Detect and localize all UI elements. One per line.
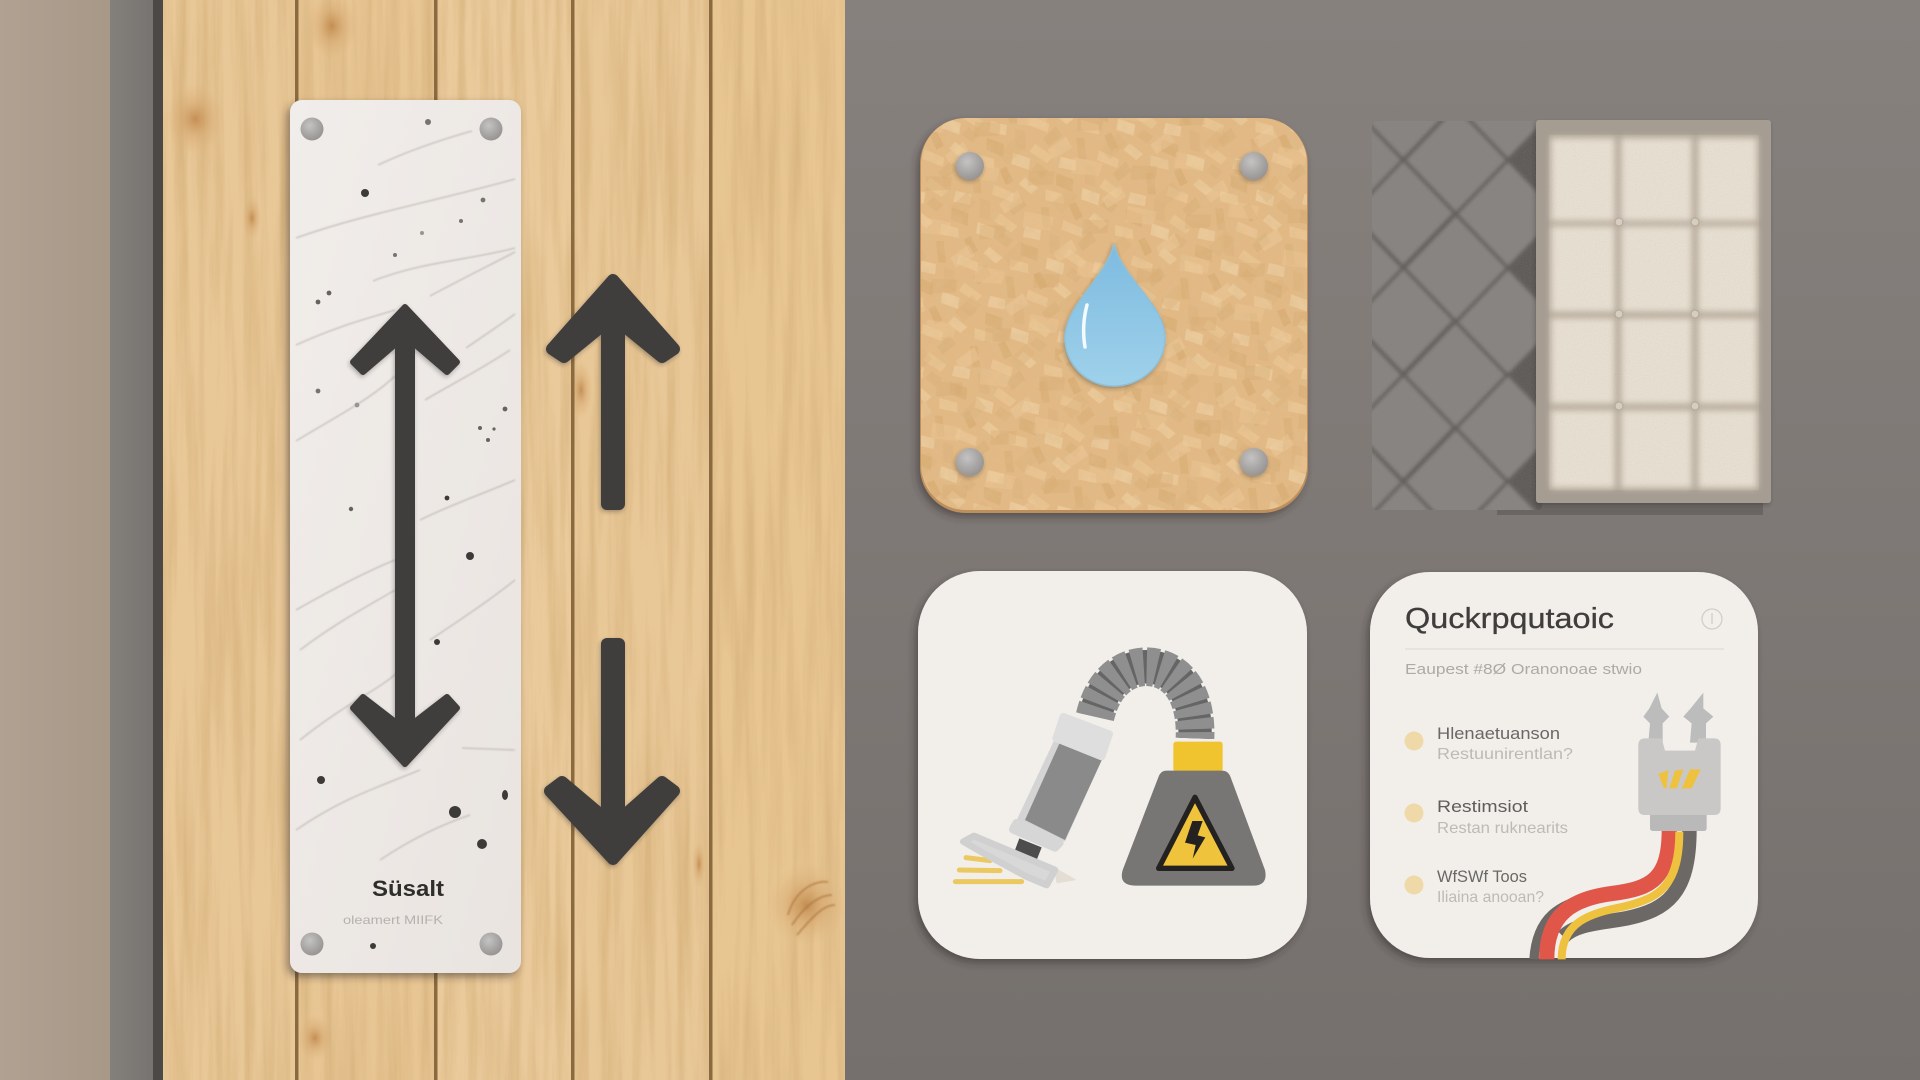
list item 2: Restan ruknearits bbox=[1437, 820, 1568, 837]
dust streaks bbox=[955, 858, 1022, 882]
wood knots bbox=[165, 0, 846, 1062]
panel: marble plaque bbox=[290, 100, 521, 973]
plank 2 bbox=[296, 0, 436, 1080]
warning triangle bbox=[1159, 797, 1232, 868]
list item 3 bbox=[1404, 867, 1544, 906]
icon: water drop bbox=[1065, 244, 1165, 386]
cream panel weave bbox=[1549, 135, 1759, 490]
panel: vacuum with electrical warning bbox=[918, 571, 1307, 959]
card background bbox=[1370, 572, 1758, 958]
plank 5 bbox=[711, 0, 845, 1080]
vacuum foot bbox=[963, 836, 1077, 885]
cream panel frame bbox=[1536, 120, 1771, 503]
dark quilted panel bbox=[1372, 121, 1542, 510]
lightning bolt bbox=[1185, 821, 1205, 859]
panel: OSB board with water drop bbox=[920, 118, 1308, 513]
panel: quick guide card bbox=[1370, 572, 1758, 959]
marble veins bbox=[296, 131, 515, 860]
OSB flakes second layer bbox=[921, 118, 1307, 510]
panel: wood planks bbox=[163, 0, 846, 1080]
plank 3 bbox=[436, 0, 573, 1080]
icon: plug with wires bbox=[1534, 693, 1721, 959]
cushion buttons bbox=[1615, 218, 1699, 410]
marble specks bbox=[316, 119, 508, 949]
icon: info bbox=[1702, 609, 1722, 629]
plug prongs bbox=[1643, 693, 1713, 743]
OSB board bbox=[920, 118, 1308, 513]
cream cushions bbox=[1551, 138, 1757, 488]
plug body bbox=[1638, 738, 1721, 815]
list item 1: Hlenaetuanson bbox=[1437, 724, 1560, 743]
double-headed arrow bbox=[353, 307, 457, 764]
beige left strip bbox=[0, 0, 110, 1080]
vacuum handle bbox=[1013, 717, 1109, 860]
card background bbox=[918, 571, 1307, 959]
plaque bolts bbox=[300, 118, 502, 956]
plank 1 bbox=[163, 0, 296, 1080]
dark panel weave bbox=[1372, 121, 1536, 510]
card subtitle: Eaupest #8Ø Oranonoae stwio bbox=[1405, 661, 1642, 678]
OSB noise bbox=[921, 118, 1307, 510]
arrow: down bbox=[550, 644, 674, 859]
wood grain texture bbox=[163, 0, 845, 1080]
grey wall strip bbox=[110, 0, 153, 1080]
arrow: up bbox=[552, 280, 674, 504]
plaque sublabel: oleamert MIIFK bbox=[343, 913, 443, 927]
plank gaps bbox=[295, 0, 712, 1080]
plug collar bbox=[1650, 808, 1707, 831]
wood plank shadow edge bbox=[153, 0, 163, 1080]
wires bbox=[1534, 830, 1689, 959]
warning unit bbox=[1122, 771, 1266, 886]
plug logo bbox=[1658, 769, 1701, 788]
list item 1: Restuunirentlan? bbox=[1437, 746, 1573, 763]
list item 1 bbox=[1404, 724, 1573, 763]
yellow connector bbox=[1173, 742, 1223, 772]
plank 4 bbox=[573, 0, 711, 1080]
plaque label: Süsalt bbox=[372, 876, 445, 901]
list item 3: Iliaina anooan? bbox=[1437, 889, 1544, 906]
hose bbox=[1095, 667, 1195, 738]
floor shadow bbox=[1497, 503, 1763, 515]
panel: quilted acoustic panels bbox=[1372, 120, 1772, 515]
list item 3: WfSWf Toos bbox=[1437, 867, 1527, 886]
OSB flakes bbox=[921, 118, 1307, 510]
divider bbox=[1405, 648, 1724, 650]
list item 2 bbox=[1404, 797, 1568, 837]
OSB bolts bbox=[956, 152, 1268, 476]
icon: vacuum and warning unit bbox=[955, 667, 1266, 886]
list item 2: Restimsiot bbox=[1437, 797, 1528, 816]
plaque body bbox=[290, 100, 521, 973]
card title: Quckrpqutaoic bbox=[1405, 603, 1614, 635]
cushion seam base bbox=[1549, 135, 1759, 490]
